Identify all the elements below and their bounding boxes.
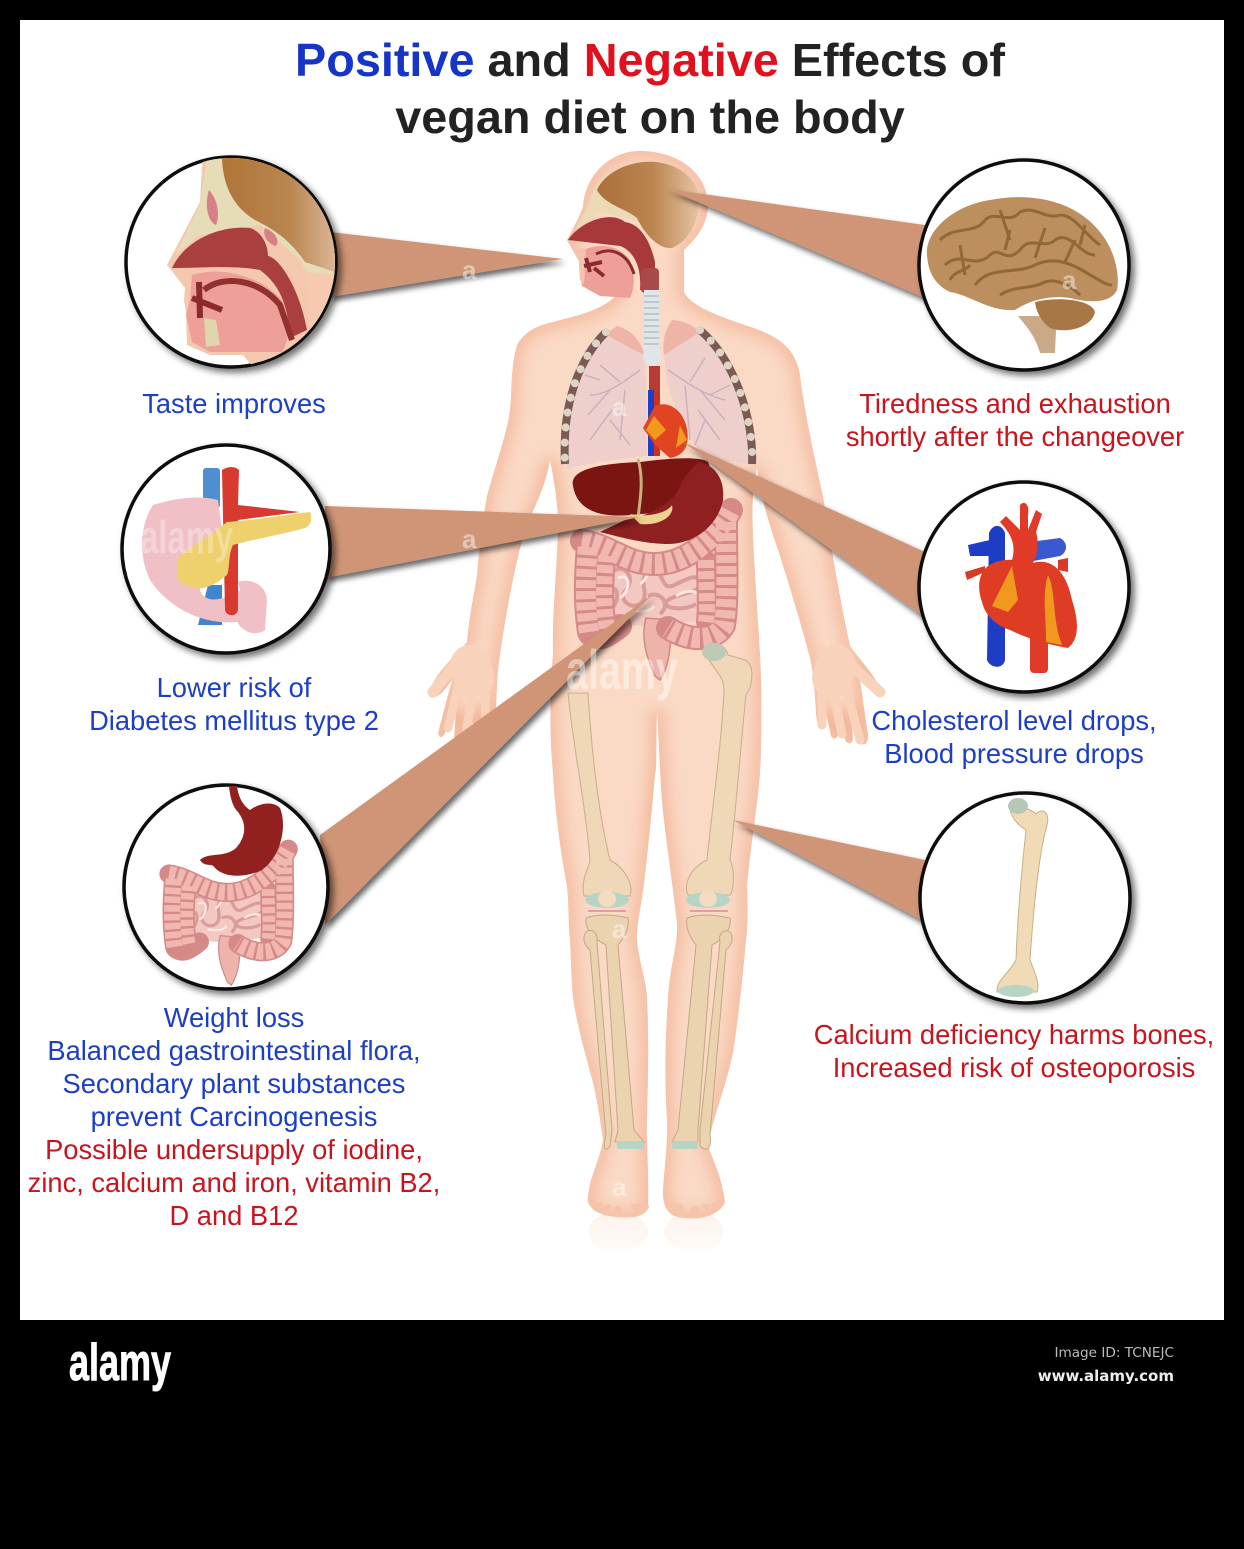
frontal sinus bbox=[207, 190, 218, 225]
title: vegan diet on the body bbox=[395, 91, 905, 143]
condyle cartilage bbox=[998, 985, 1034, 997]
label: weight loss and undersupply: Secondary plant substances bbox=[63, 1068, 405, 1099]
pointer: pancreas bbox=[325, 506, 640, 578]
intestines bbox=[582, 510, 731, 680]
great vessels bbox=[648, 366, 660, 456]
stomach bbox=[600, 462, 723, 544]
footer image id: Image ID: TCNEJC bbox=[1054, 1345, 1174, 1361]
circle: digestive bbox=[124, 785, 328, 989]
circle: heart bbox=[919, 482, 1129, 692]
label: weight loss and undersupply: Balanced gastrointestinal flora, bbox=[47, 1035, 421, 1066]
body silhouette bbox=[429, 151, 884, 1218]
aortic arch and branches bbox=[1000, 503, 1042, 568]
femur right bbox=[686, 644, 752, 895]
label: weight loss and undersupply bbox=[28, 1002, 440, 1231]
femur bone bbox=[997, 807, 1048, 992]
lungs bbox=[563, 320, 752, 468]
watermark letters: a bbox=[462, 255, 477, 285]
pancreas bbox=[630, 505, 672, 524]
watermark on pancreas: alamy bbox=[140, 511, 233, 563]
nasal cavity bbox=[172, 228, 307, 338]
head anatomy bbox=[568, 162, 699, 298]
artery bbox=[222, 467, 300, 615]
aorta lower bbox=[1030, 635, 1048, 673]
pointer: bone bbox=[733, 820, 925, 922]
label: calcium: Increased risk of osteoporosis bbox=[833, 1052, 1195, 1083]
label: weight loss and undersupply: Possible undersupply of iodine, bbox=[45, 1134, 423, 1165]
watermark letters: a bbox=[612, 392, 627, 422]
watermark: alamy on body: alamy bbox=[566, 638, 678, 701]
label: calcium: Calcium deficiency harms bones, bbox=[814, 1019, 1214, 1050]
circle: brain bbox=[919, 160, 1129, 370]
label: diabetes: Lower risk of bbox=[157, 672, 312, 703]
skin of profile bbox=[167, 150, 340, 372]
toes bbox=[595, 1202, 719, 1212]
title: Positive and Negative Effects of bbox=[295, 34, 1005, 86]
watermark letters: a bbox=[1062, 265, 1077, 295]
edge shading bbox=[429, 151, 884, 1218]
label: diabetes: Diabetes mellitus type 2 bbox=[89, 705, 379, 736]
gallbladder band bbox=[638, 459, 641, 518]
pointer: heart bbox=[683, 442, 925, 618]
pulmonary artery bbox=[1022, 538, 1066, 562]
cerebellum bbox=[1035, 299, 1095, 330]
circle: femur bbox=[920, 793, 1130, 1003]
knee cartilage bbox=[585, 891, 730, 911]
label: tiredness bbox=[846, 388, 1184, 452]
tongue and jaw bbox=[186, 272, 288, 352]
circle: head section bbox=[126, 150, 340, 372]
label: diabetes bbox=[89, 672, 379, 736]
watermark letters: a bbox=[462, 524, 477, 554]
label: calcium bbox=[814, 1019, 1214, 1083]
back of throat skin bbox=[307, 272, 334, 330]
brain part bbox=[222, 150, 335, 272]
palate band bbox=[204, 281, 292, 340]
label: weight loss and undersupply: prevent Carcinogenesis bbox=[91, 1101, 377, 1132]
footer image id bbox=[1038, 1345, 1174, 1385]
fade over reflection bbox=[570, 1219, 740, 1269]
vein bbox=[203, 468, 220, 508]
label: weight loss and undersupply: D and B12 bbox=[170, 1200, 298, 1231]
pointer: brain bbox=[667, 189, 925, 298]
windpipe bbox=[643, 290, 662, 368]
skull bone bbox=[176, 158, 335, 305]
left hand bbox=[433, 665, 486, 734]
duodenum bbox=[142, 498, 267, 633]
intestines bbox=[169, 849, 288, 985]
gyri bbox=[940, 210, 1112, 295]
label: cholesterol bbox=[871, 705, 1157, 769]
right lower leg bones bbox=[672, 915, 732, 1149]
jaw bone bbox=[204, 318, 220, 347]
footer logo: alamy bbox=[69, 1334, 171, 1392]
heart highlights bbox=[992, 566, 1062, 645]
label: tiredness: Tiredness and exhaustion bbox=[859, 388, 1171, 419]
cerebrum bbox=[927, 197, 1118, 310]
vein lower bbox=[198, 585, 222, 625]
ankle cartilage bbox=[617, 1141, 698, 1149]
teeth cross bbox=[192, 282, 222, 318]
title bbox=[295, 34, 1005, 143]
brain stem bbox=[1018, 316, 1056, 353]
throat bbox=[641, 268, 659, 293]
watermark letters bbox=[462, 255, 1077, 1202]
feet reflection bbox=[588, 1212, 724, 1252]
esophagus and stomach bbox=[200, 786, 283, 876]
left lower leg bones bbox=[584, 915, 644, 1149]
body figure bbox=[429, 151, 884, 1269]
watermark letters: a bbox=[612, 914, 627, 944]
pointer: taste bbox=[330, 232, 563, 297]
label: weight loss and undersupply: zinc, calcium and iron, vitamin B2, bbox=[28, 1167, 440, 1198]
label: weight loss and undersupply: Weight loss bbox=[164, 1002, 304, 1033]
footer image id: www.alamy.com bbox=[1038, 1367, 1174, 1385]
pancreas organ bbox=[177, 512, 311, 588]
right hand bbox=[822, 665, 880, 740]
femur left bbox=[568, 693, 631, 896]
superior vena cava and branch bbox=[968, 526, 1005, 667]
femur head bbox=[702, 643, 726, 661]
femur head cartilage bbox=[1008, 798, 1028, 814]
pulmonary veins bbox=[965, 558, 1068, 580]
label: taste: Taste improves bbox=[142, 388, 326, 419]
label: cholesterol: Cholesterol level drops, bbox=[871, 705, 1157, 736]
heart bbox=[643, 404, 688, 458]
circle: pancreas bbox=[122, 445, 330, 653]
liver bbox=[573, 458, 710, 516]
label: tiredness: shortly after the changeover bbox=[846, 421, 1184, 452]
label: cholesterol: Blood pressure drops bbox=[884, 738, 1144, 769]
heart body bbox=[979, 560, 1077, 648]
sphenoid sinus bbox=[264, 228, 277, 246]
pointer: intestine bbox=[320, 594, 653, 925]
watermark letters: a bbox=[612, 1172, 627, 1202]
